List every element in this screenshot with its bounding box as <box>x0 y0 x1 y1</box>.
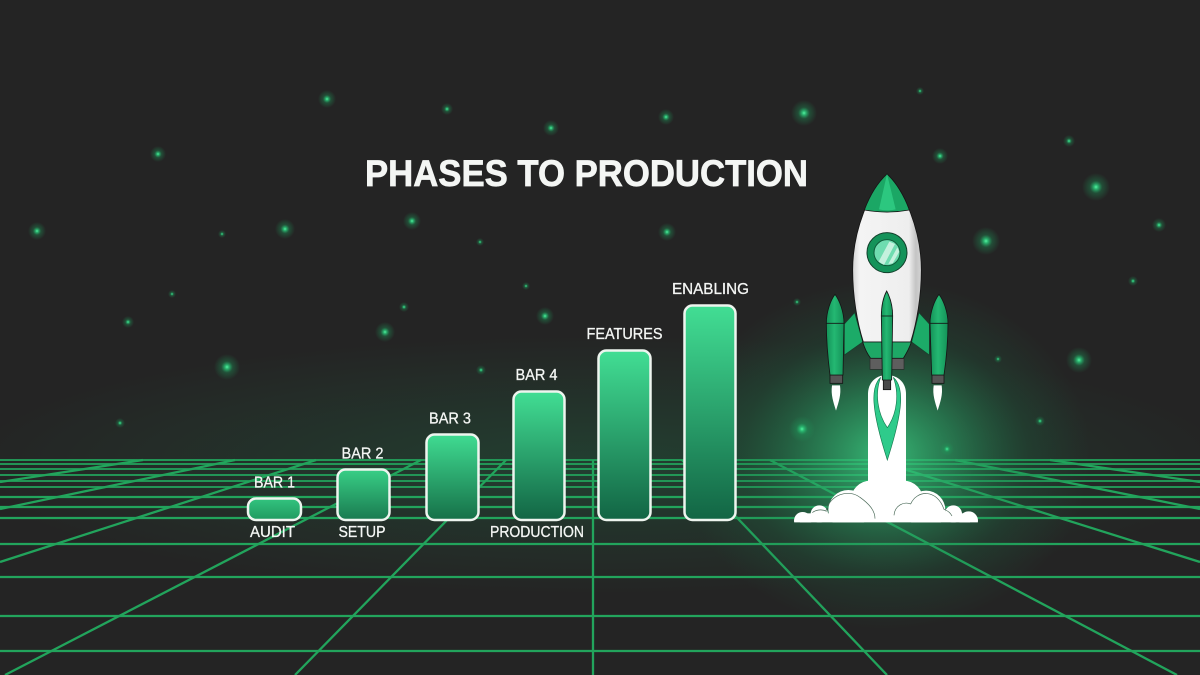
background star particles <box>28 87 1166 456</box>
exhaust plume and smoke clouds <box>794 375 978 530</box>
rocket exhaust glow <box>680 280 1090 630</box>
bar 4: production: PRODUCTION <box>490 524 584 541</box>
nose cone <box>864 174 909 212</box>
title: PHASES TO PRODUCTION <box>365 153 808 194</box>
center booster <box>881 291 893 390</box>
main engine nozzle <box>870 358 904 369</box>
bar 5: features <box>586 326 662 520</box>
bar 1: audit <box>248 474 301 541</box>
left booster fin and right booster fin <box>844 313 929 355</box>
bar 6: enabling <box>672 281 749 520</box>
tail band <box>863 342 911 358</box>
bar 5: features: FEATURES <box>586 326 662 343</box>
right side booster <box>930 294 948 411</box>
porthole window <box>867 233 907 273</box>
wide ambient floor glow <box>0 335 1200 595</box>
bar chart <box>248 281 749 541</box>
left side booster <box>826 294 844 411</box>
bar 2: setup <box>338 446 390 541</box>
rocket body <box>853 174 921 342</box>
bar 6: enabling: ENABLING <box>672 281 749 298</box>
bar 2: setup: SETUP <box>338 524 386 541</box>
icon: rocket launch <box>794 174 978 530</box>
bar 4: production <box>490 367 584 541</box>
bar 1: audit: BAR 1 <box>254 474 295 492</box>
nose highlight <box>879 174 896 210</box>
bar 1: audit: AUDIT <box>250 524 296 541</box>
bar 2: setup: BAR 2 <box>342 446 384 462</box>
bar 4: production: BAR 4 <box>516 367 558 384</box>
bar 3 <box>426 410 478 520</box>
perspective grid floor <box>0 460 1200 675</box>
bar 3: BAR 3 <box>429 410 471 428</box>
